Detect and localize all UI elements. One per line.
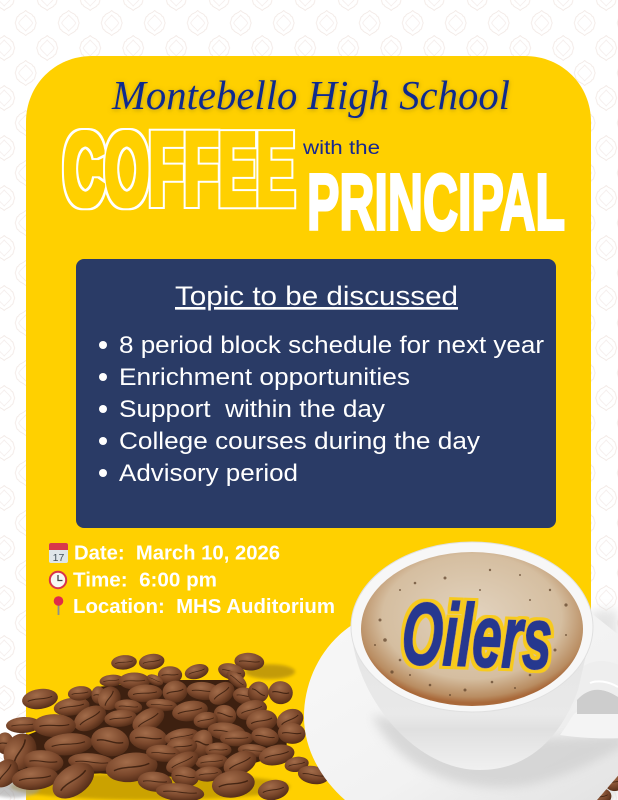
coffee foam [361,552,583,706]
time: Time: 6:00 pm [73,570,217,592]
title: school name: Montebello High School [111,72,510,118]
icon: pin [54,596,63,615]
coffee beans [0,652,330,800]
topics list: Support within the day [119,396,386,423]
handle [560,661,618,738]
topics list: Advisory period [119,460,298,487]
icon: clock [50,572,66,588]
cup body [352,625,593,770]
foam speckles [374,569,568,696]
panel: topics [76,259,556,528]
date: Date: March 10, 2026 [74,542,280,564]
topics list: Enrichment opportunities [119,364,410,391]
icon: calendar [49,543,68,564]
topics list [99,332,544,487]
topics list: College courses during the day [119,428,481,455]
topics heading: Topic to be discussed [175,281,458,311]
event details [49,542,335,618]
location: Location: MHS Auditorium [73,596,335,618]
topics list: 8 period block schedule for next year [119,332,544,359]
icon: calendar: 17 [53,552,64,564]
heading: COFFEE outlined: COFFEE [64,112,294,228]
cup rim [351,542,593,712]
saucer [304,612,618,800]
heading: with the: with the [302,137,380,159]
coffee cup [304,542,618,800]
